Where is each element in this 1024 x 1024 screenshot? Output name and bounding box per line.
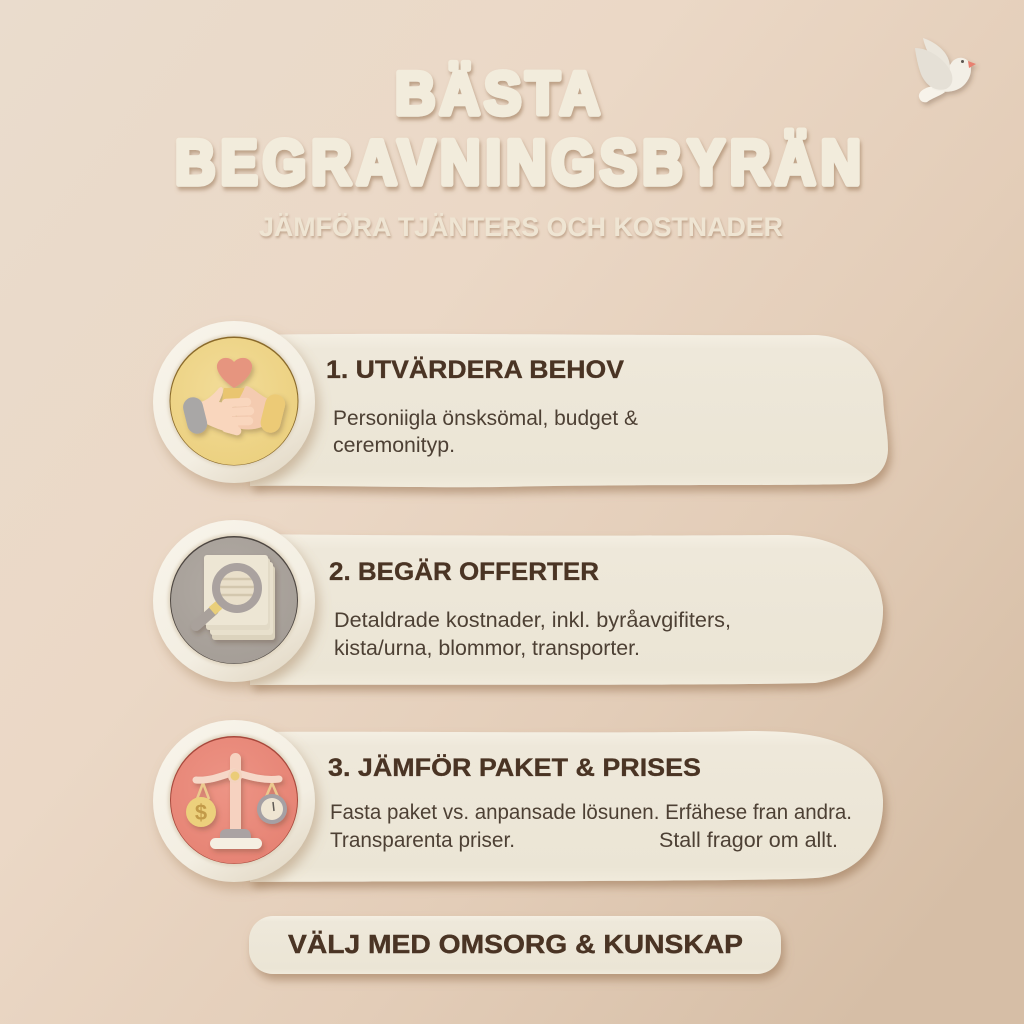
body text: Stall fragor om allt. — [659, 829, 838, 852]
body text: ceremonityp. — [333, 434, 455, 457]
body text: kista/urna, blommor, transporter. — [334, 637, 640, 660]
panel: step 2 — [153, 520, 883, 685]
body text: Transparenta priser. — [330, 829, 515, 852]
body text — [333, 407, 638, 457]
body text: Detaldrade kostnader, inkl. byråavgifiters, — [334, 609, 731, 632]
body text: Personiigla önsksömal, budget & — [333, 407, 638, 430]
title — [175, 60, 861, 198]
panel: step 3 — [153, 720, 883, 882]
heading: 1. UTVÄRDERA BEHOV — [326, 356, 624, 384]
left hand — [199, 387, 240, 432]
panel body — [250, 334, 888, 487]
icon badge: documents and magnifier — [153, 520, 315, 682]
title line: BEGRAVNINGSBYRÄN: BEGRAVNINGSBYRÄN — [175, 127, 861, 198]
heading: 3. JÄMFÖR PAKET & PRISES — [328, 753, 701, 782]
heading: 2. BEGÄR OFFERTER — [329, 558, 599, 586]
panel body — [250, 534, 883, 685]
title line: BÄSTA: BÄSTA — [395, 60, 600, 127]
panel body — [250, 731, 883, 882]
icon badge: hands and heart — [153, 321, 315, 483]
right hand — [236, 386, 272, 429]
cuffs — [181, 395, 209, 436]
heart — [217, 358, 252, 388]
footer pill — [249, 916, 781, 974]
footer text: VÄLJ MED OMSORG & KUNSKAP — [288, 929, 743, 959]
icon: dove — [915, 38, 976, 102]
panel: step 1 — [153, 321, 888, 487]
body text — [334, 609, 731, 660]
icon badge: scales with coin and clock — [153, 720, 315, 882]
body text — [330, 801, 852, 852]
body text: Fasta paket vs. anpansade lösunen. Erfähese fran andra. — [330, 801, 852, 824]
icon badge: scales with coin and clock: $ — [195, 800, 207, 825]
subtitle: JÄMFÖRA TJÄNTERS OCH KOSTNADER — [259, 212, 783, 242]
